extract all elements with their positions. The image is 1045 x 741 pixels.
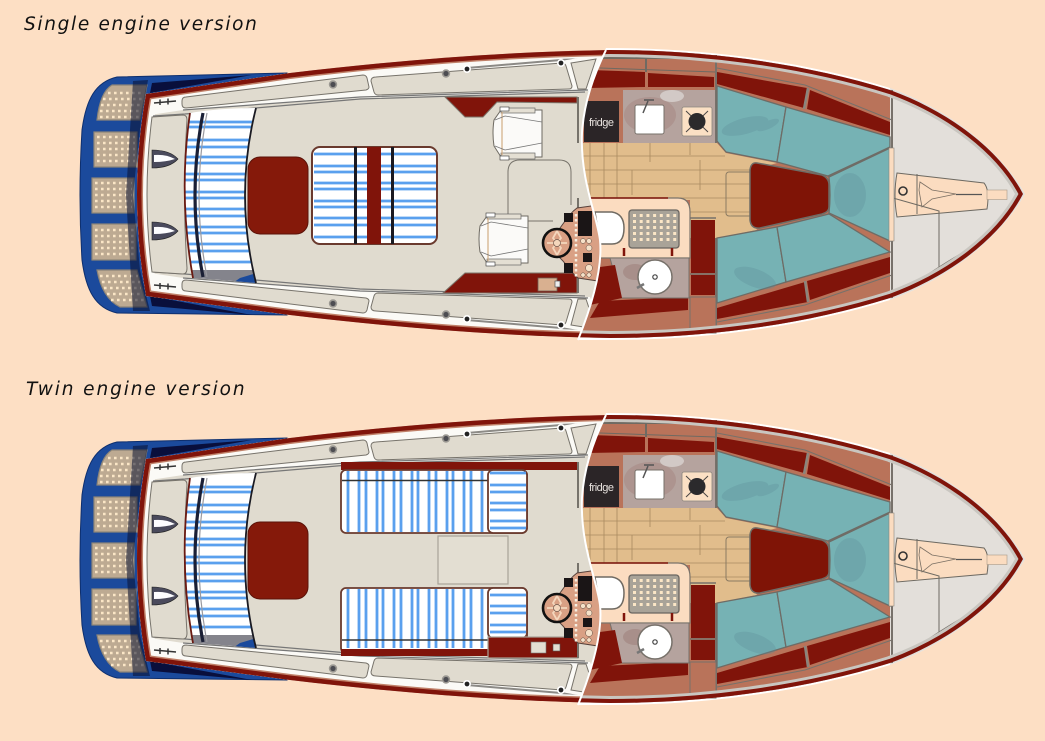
interior cabin — [137, 415, 1030, 703]
cockpit table — [248, 522, 308, 599]
fridge label: fridge — [589, 482, 614, 494]
cabin divider — [578, 415, 606, 705]
hull and side decks — [137, 415, 1023, 703]
helm floor outline — [508, 160, 571, 221]
cabin divider — [578, 50, 606, 340]
lower settee — [341, 588, 527, 653]
helm posts — [577, 462, 579, 658]
fridge label: fridge — [589, 117, 614, 129]
helm posts — [577, 97, 579, 293]
seat lower — [479, 213, 528, 266]
icon: stern fairlead lower — [152, 587, 178, 605]
icon: stern fairlead lower — [152, 222, 178, 240]
swim platform with gratings — [80, 438, 287, 680]
upper red coaming — [341, 462, 578, 470]
control box — [538, 278, 560, 291]
sunbed cushion — [312, 147, 437, 244]
hull and side decks — [137, 50, 1023, 338]
boat plan: twin engine version — [80, 415, 1030, 705]
aft cushion — [175, 105, 260, 285]
centre hatch — [438, 536, 508, 584]
icon: stern fairlead upper — [152, 150, 178, 168]
interior cabin — [137, 50, 1030, 338]
upper settee — [341, 470, 527, 533]
boat plan: single engine version — [80, 50, 1030, 340]
title: single engine version: Single engine version — [24, 14, 259, 35]
title: twin engine version: Twin engine version — [26, 379, 247, 400]
swim platform with gratings — [80, 73, 287, 315]
seat upper — [493, 107, 542, 160]
cockpit table — [248, 157, 308, 234]
helm console — [543, 570, 602, 646]
locker lower — [443, 273, 577, 293]
icon: stern fairlead upper — [152, 515, 178, 533]
helm console — [543, 205, 602, 281]
lower locker with controls — [341, 637, 578, 658]
aft cushion — [175, 470, 260, 650]
locker upper — [445, 97, 577, 117]
